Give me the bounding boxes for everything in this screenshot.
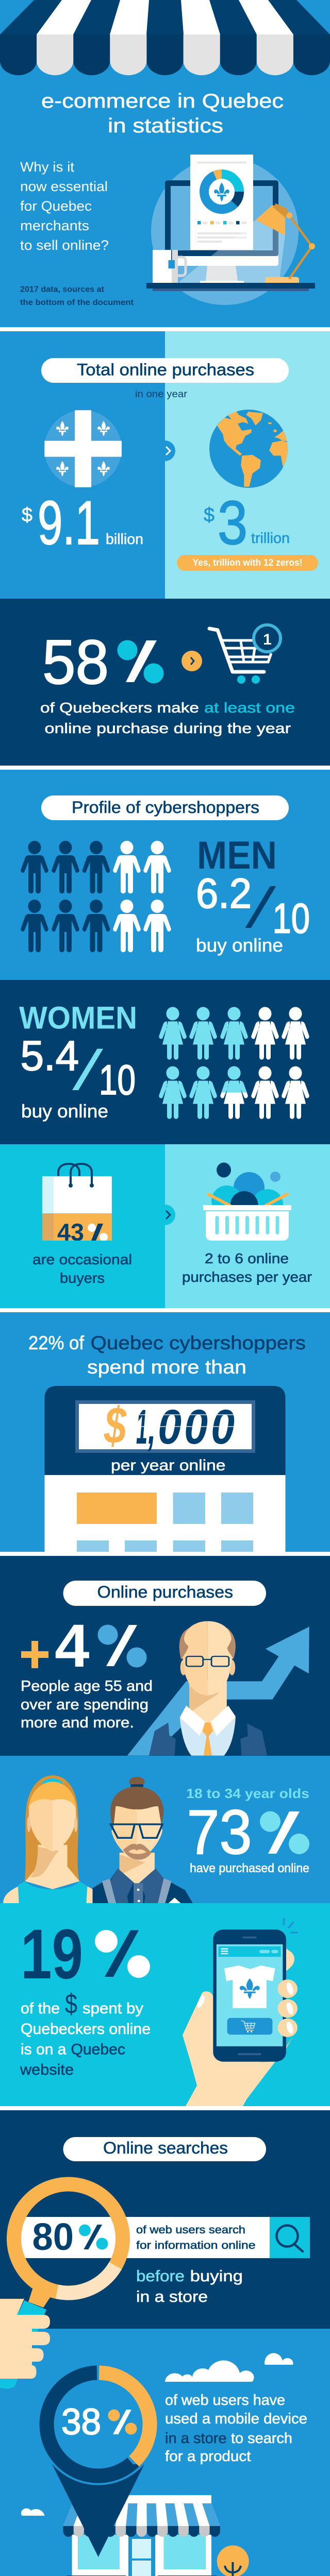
section: profile men (0, 770, 330, 980)
icon: hand gripping handle (0, 2299, 50, 2379)
icon: report sheet with donut chart (190, 155, 253, 250)
icon: monitor (165, 180, 278, 283)
section: 22 percent spend (0, 1312, 330, 1552)
caption: People age 55 and (21, 1678, 153, 1694)
intro question: to sell online? (20, 238, 109, 253)
caption: have purchased online (190, 1861, 309, 1875)
caption: over are spending (21, 1697, 148, 1713)
subheading: in one year (135, 389, 188, 400)
heading text: spend more than (87, 1357, 246, 1378)
caption (20, 1989, 151, 2078)
illustration: rising arrow and older man (127, 1621, 309, 1756)
icon: search magnifier (276, 2226, 303, 2251)
pictogram: women 5.4 of 10 (159, 1007, 309, 1119)
caption: buying (190, 2267, 243, 2285)
icon: desk lamp (256, 204, 315, 283)
icon: calculator (44, 1386, 286, 1552)
caption: online purchase during the year (44, 720, 291, 736)
heading pill: Profile of cybershoppers (72, 798, 259, 817)
heading pill (41, 358, 289, 383)
clouds (21, 2353, 293, 2516)
magnifier cyan grip (0, 2300, 46, 2389)
caption: more and more. (21, 1715, 134, 1731)
search bar text (136, 2224, 256, 2251)
search bar (21, 2215, 310, 2258)
heading pill (41, 795, 289, 820)
hand and forearm (183, 1991, 282, 2106)
data note (20, 285, 134, 307)
arrow: orange chevron (182, 651, 202, 671)
data note: the bottom of the document (20, 298, 134, 307)
icon: young woman (3, 1775, 102, 1903)
desk top (146, 283, 315, 291)
stat: 73%: 73 (187, 1797, 252, 1867)
section: profile women (19, 1007, 309, 1122)
heading pill (63, 2137, 266, 2161)
caption: at least one (204, 700, 295, 716)
caption (40, 700, 295, 736)
icon: Quebec flag (44, 410, 122, 487)
section: occasional buyers (0, 1144, 330, 1308)
caption: Quebeckers online (21, 2021, 151, 2038)
stat: men: 6.2 (196, 870, 252, 917)
stat: 80%: 80 (32, 2215, 74, 2258)
icon: shopping bag 43% (42, 1164, 112, 1246)
stat: men: MEN (197, 834, 277, 877)
search bar text: for information online (136, 2240, 256, 2251)
caption: occasional buyers: buyers (60, 1270, 105, 1286)
heading pill (63, 1581, 266, 1606)
magnifier ring (14, 2184, 123, 2293)
pictogram: men 6.2 of 10 (21, 841, 171, 952)
lamp light cone (178, 220, 285, 283)
calculator display amount (104, 1397, 237, 1454)
arrow: chevron badge (165, 1205, 175, 1225)
caption: website (20, 2061, 74, 2078)
stat: men: 10 (272, 895, 310, 942)
caption: of web users have (165, 2392, 285, 2409)
calculator display amount: , (147, 1400, 156, 1454)
section: 58 percent (0, 599, 330, 766)
illustration: hand holding phone (183, 1919, 298, 2106)
icon: calculator: per year online (111, 1457, 226, 1474)
calculator display amount: 0 (158, 1400, 182, 1454)
stat: men: buy online (196, 935, 283, 956)
caption: of Quebeckers make (40, 700, 199, 716)
heading text: Quebec cybershoppers (91, 1332, 306, 1353)
stat: women: buy online (21, 1100, 108, 1122)
title: e-commerce in Quebec (41, 90, 284, 112)
icon: globe (209, 410, 289, 488)
stat: women (19, 1001, 137, 1122)
stat: 9.1 billion: billion (106, 531, 143, 548)
calculator display amount: 0 (184, 1400, 208, 1454)
stat: women: 10 (99, 1057, 136, 1104)
heading pill: Online purchases (97, 1583, 233, 1601)
stat: 3 trillion: 3 (218, 488, 248, 557)
caption (21, 1678, 153, 1731)
heading text (28, 1332, 306, 1378)
icon: young man with glasses (93, 1777, 193, 1903)
stat: 38%: 38 (61, 2402, 101, 2443)
caption: in a store (136, 2287, 208, 2306)
section: young adults (0, 1756, 330, 1903)
arrow: growth (127, 1626, 309, 1756)
section: mobile in store (0, 2329, 330, 2576)
illustration: storefront (63, 2495, 220, 2576)
intro question: Why is it (20, 159, 74, 175)
age label: 18 to 34 year olds (186, 1786, 309, 1801)
stat: 73% (187, 1797, 309, 1867)
section: hero header (0, 0, 330, 327)
illustration: desk with monitor, report, mug and lamp (146, 155, 315, 305)
calculator display amount: 1 (136, 1400, 147, 1454)
stat: 80% (32, 2215, 108, 2258)
callout: trillion note (177, 555, 318, 571)
search bar text: of web users search (136, 2224, 245, 2236)
caption: Quebec (71, 2041, 125, 2058)
stat: 3 trillion: $ (204, 504, 214, 526)
caption: in a store (165, 2430, 227, 2447)
caption: is on a (21, 2041, 67, 2058)
callout: trillion note: Yes, trillion with 12 zeros! (193, 557, 302, 568)
caption: before (136, 2267, 185, 2285)
icon: shopping bag 43%: 43 (57, 1218, 84, 1246)
magnifier neck (28, 2286, 58, 2308)
stat: 38% (61, 2402, 137, 2443)
caption: occasional buyers: are occasional (32, 1251, 132, 1267)
illustration: young woman and man (3, 1775, 193, 1903)
title (41, 90, 284, 137)
fingers (278, 1979, 298, 2037)
stat: +4% (21, 1612, 146, 1680)
stat: women: WOMEN (19, 1001, 137, 1036)
caption (165, 2392, 307, 2465)
caption: occasional buyers (32, 1251, 132, 1286)
caption: to search (231, 2430, 292, 2447)
section: total online purchases (0, 331, 330, 599)
caption (136, 2267, 243, 2306)
section: 19 percent Quebec websites (0, 1903, 330, 2106)
caption: purchases per year: purchases per year (182, 1269, 312, 1285)
caption: for a product (165, 2448, 251, 2465)
stat: 19% (21, 1915, 150, 1994)
title: in statistics (108, 115, 223, 137)
intro question: for Quebec (20, 198, 92, 214)
stat: 19%: 19 (21, 1915, 83, 1994)
chart: map pin donut 38% (47, 2373, 150, 2557)
caption: purchases per year (182, 1250, 312, 1285)
stat: 58% (42, 627, 164, 697)
intro question (20, 159, 109, 253)
stat: 9.1 billion: 9.1 (38, 488, 100, 557)
icon: shopping cart with badge: 1 (263, 631, 272, 648)
caption: $ (65, 1989, 77, 2020)
heading pill: Online searches (103, 2139, 228, 2157)
heading text: 22% of (28, 1332, 85, 1353)
stat: +4%: 4 (55, 1612, 90, 1680)
stat: 3 trillion (204, 488, 290, 557)
stat: 3 trillion: trillion (251, 530, 290, 547)
stat: women: 5.4 (21, 1032, 79, 1079)
section: online searches (0, 2110, 330, 2329)
icon: striped shop awning (0, 0, 330, 75)
icon: smartphone (213, 1929, 286, 2062)
heading pill: Total online purchases (77, 361, 254, 379)
arrow: chevron badge (165, 440, 175, 461)
illustration: magnifying glass held in hand (0, 2184, 123, 2389)
icon: shopping cart with badge (209, 625, 280, 684)
icon: tree (217, 2545, 249, 2576)
intro question: merchants (20, 218, 89, 233)
caption: spent by (82, 2000, 143, 2017)
calculator display amount: 0 (211, 1400, 235, 1454)
section: online purchases seniors (0, 1556, 330, 1756)
intro question: now essential (20, 179, 108, 194)
caption: of the (21, 2000, 60, 2017)
data note: 2017 data, sources at (20, 285, 105, 294)
signal rays (284, 1919, 298, 1933)
caption: used a mobile device (165, 2411, 307, 2427)
calculator display amount: $ (104, 1397, 127, 1454)
stat: men (196, 834, 310, 956)
icon: man in suit (149, 1621, 267, 1756)
stat: 9.1 billion: $ (22, 504, 32, 526)
stat: 58%: 58 (42, 627, 109, 697)
caption: purchases per year: 2 to 6 online (205, 1250, 289, 1266)
icon: basket with goods (203, 1162, 291, 1241)
icon: coffee mug (153, 250, 186, 283)
